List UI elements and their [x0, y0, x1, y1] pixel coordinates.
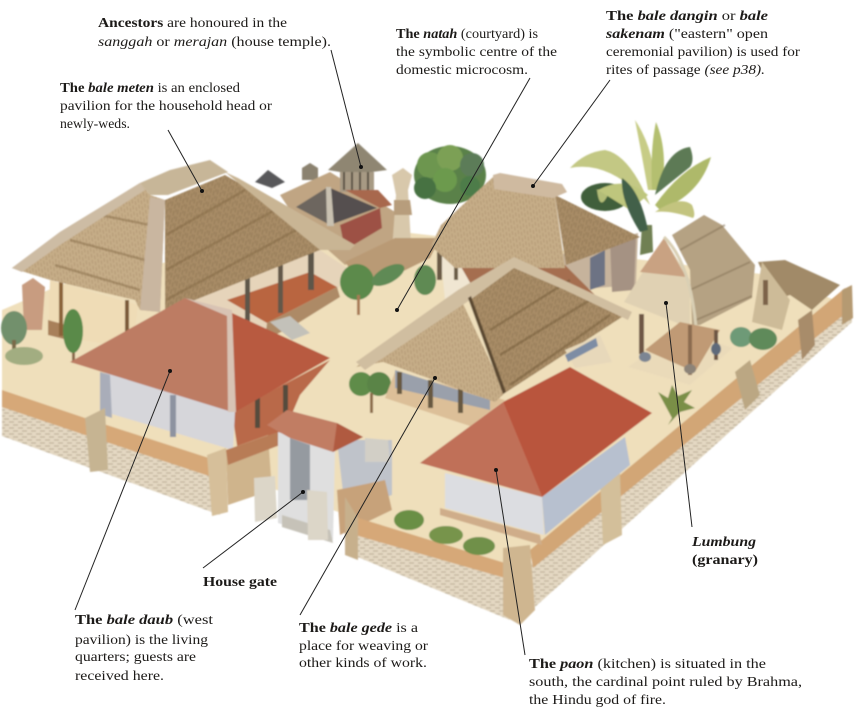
garden trees and shrubs — [340, 259, 436, 413]
shrubs at granary — [730, 327, 777, 350]
bale dangin pavilion — [431, 173, 640, 300]
label: bale daub: quarters; guests are — [75, 649, 196, 664]
label: paon: south, the cardinal point ruled by Brahma, — [529, 674, 802, 689]
far left shrine and trees — [1, 278, 83, 365]
label: lumbung — [691, 534, 758, 567]
lumbung granary — [624, 215, 755, 385]
label: bale dangin: sakenam ("eastern" open — [605, 26, 768, 41]
temple gate tower — [392, 168, 412, 268]
label: bale gede — [299, 620, 429, 670]
label: paon — [529, 656, 802, 707]
label: ancestors — [98, 15, 331, 49]
bale gede pavilion — [356, 257, 632, 426]
label: ancestors: Ancestors are honoured in the — [98, 15, 287, 30]
label: bale dangin: The bale dangin or bale — [606, 8, 768, 23]
label: natah — [396, 26, 557, 77]
label: paon: The paon (kitchen) is situated in the — [529, 656, 766, 671]
illustration: Balinese house compound — [1, 120, 853, 625]
front wall right of gate — [337, 480, 535, 625]
label: natah: The natah (courtyard) is — [396, 26, 538, 41]
bale meten pavilion — [12, 160, 355, 348]
small pavilion at back right — [752, 260, 840, 330]
label: bale dangin — [605, 8, 801, 77]
label: bale gede: The bale gede is a — [299, 620, 418, 635]
back wall — [345, 238, 440, 290]
left wall — [2, 390, 280, 516]
label: bale daub: The bale daub (west — [75, 612, 213, 627]
label: natah: domestic microcosm. — [396, 62, 528, 77]
label: lumbung: Lumbung — [691, 534, 756, 549]
fan palm shrub — [658, 385, 695, 425]
right wall — [530, 285, 853, 607]
label: lumbung: (granary) — [692, 552, 758, 567]
courtyard ground — [2, 225, 848, 575]
label: paon: the Hindu god of fire. — [529, 692, 666, 707]
bale daub pavilion — [70, 298, 330, 465]
leader lines — [75, 50, 692, 655]
back temple: sanggah — [255, 143, 400, 265]
label: bale meten: pavilion for the household head or — [60, 98, 273, 113]
label: house gate: House gate — [203, 574, 277, 589]
label: bale dangin: ceremonial pavilion) is used for — [606, 44, 801, 59]
garden shrubs — [394, 510, 495, 555]
palm tree — [570, 120, 711, 255]
tree behind — [414, 145, 486, 204]
label: natah: the symbolic centre of the — [396, 44, 557, 59]
label: bale gede: place for weaving or — [299, 638, 429, 653]
label: bale daub — [75, 612, 213, 683]
label: bale dangin: rites of passage (see p38). — [606, 62, 765, 77]
label: bale meten — [60, 80, 273, 131]
label: bale daub: received here. — [75, 668, 164, 683]
label: ancestors: sanggah or merajan (house temple). — [98, 34, 331, 49]
label: bale daub: pavilion) is the living — [75, 632, 208, 647]
label: bale meten: newly-weds. — [60, 116, 130, 131]
label: bale gede: other kinds of work. — [299, 655, 427, 670]
paon kitchen — [420, 367, 652, 545]
house gate — [254, 410, 392, 543]
label: bale meten: The bale meten is an enclosed — [60, 80, 240, 95]
